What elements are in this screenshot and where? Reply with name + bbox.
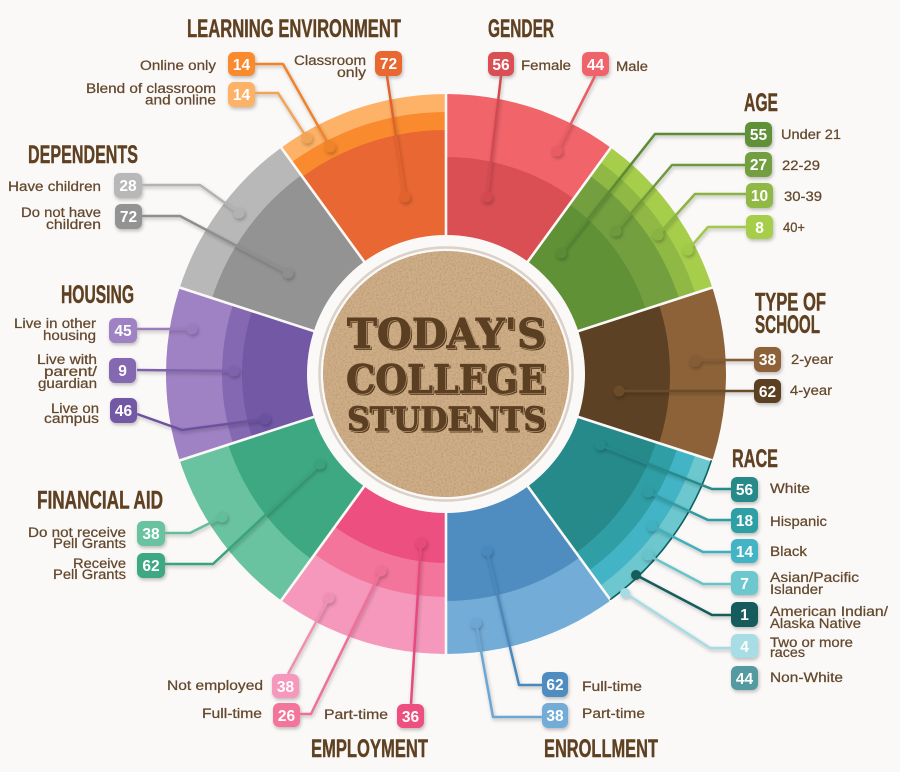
callout: female: Female — [521, 58, 571, 73]
heading — [755, 288, 826, 339]
callout: other housing — [14, 316, 198, 343]
callout: have children: 28 — [119, 178, 137, 195]
callout: have children — [8, 173, 244, 218]
heading: SCHOOL — [755, 311, 820, 339]
callout: receive: Pell Grants — [53, 567, 126, 582]
callout: non-white — [731, 666, 843, 690]
wedge: dependents — [180, 148, 363, 330]
callout: classroom only: Classroom — [294, 53, 366, 68]
wedge: employment — [282, 487, 445, 654]
callout: under 21 — [556, 122, 841, 258]
callout: on campus — [44, 398, 270, 430]
callout: no children: children — [46, 217, 101, 232]
callout: asian/pacific islander: Asian/Pacific — [770, 570, 859, 585]
callout: american indian — [631, 570, 888, 631]
panel: age — [556, 89, 841, 258]
callout: do not receive: Pell Grants — [53, 536, 126, 551]
callout: black: Black — [770, 544, 807, 559]
wedge: gender — [447, 94, 610, 261]
callout: receive — [53, 458, 326, 582]
callout: do not receive: Do not receive — [28, 525, 126, 540]
wedge: enrollment — [447, 487, 610, 654]
callout: full-time: 26 — [278, 708, 295, 725]
wedge: financial aid — [180, 418, 364, 600]
callout: part-time: Part-time — [324, 707, 388, 722]
callout: non-white: 44 — [736, 671, 753, 688]
callout: not employed: 38 — [277, 679, 294, 696]
callout: full-time — [482, 546, 642, 697]
title: STUDENTS — [347, 400, 546, 438]
callout: part-time — [470, 618, 645, 728]
callout: parent/guardian — [37, 352, 240, 391]
callout: non-white: Non-White — [770, 670, 843, 685]
wedge: race — [528, 418, 712, 600]
callout: 2-year: 2-year — [791, 352, 834, 367]
wedge: learning environment — [282, 94, 445, 261]
callout: not employed: Not employed — [167, 678, 263, 693]
callout: male: 44 — [587, 57, 604, 74]
callout: 4-year — [614, 379, 833, 403]
callout: full-time: Full-time — [202, 706, 262, 721]
callout: receive: Receive — [73, 556, 126, 571]
callout: full-time — [202, 566, 386, 727]
callout: parent/guardian: 9 — [118, 363, 127, 380]
heading: ENROLLMENT — [544, 735, 658, 763]
callout: black: 14 — [736, 544, 753, 561]
callout: blend: Blend of classroom — [86, 81, 216, 96]
panel: race — [594, 440, 888, 690]
callout: parent/guardian: parent/ — [44, 364, 97, 379]
callout: two or more races: 4 — [740, 639, 749, 656]
callout: 40+ — [682, 215, 805, 256]
wedge: housing — [166, 288, 314, 460]
callout: 4-year: 4-year — [790, 383, 833, 398]
heading: HOUSING — [61, 281, 134, 309]
callout: two or more races — [620, 588, 853, 660]
callout: asian/pacific islander — [642, 550, 859, 597]
callout: 22-29: 27 — [750, 157, 767, 174]
callout: online only: 14 — [233, 57, 250, 74]
callout: 2-year — [689, 347, 834, 372]
callout: other housing: 45 — [114, 323, 132, 340]
title: TODAY'S — [347, 310, 546, 358]
callout: have children: Have children — [8, 179, 101, 194]
callout: two or more races: Two or more — [770, 635, 853, 650]
callout: under 21: 55 — [750, 127, 767, 144]
callout: black — [646, 520, 807, 563]
callout: white — [594, 440, 810, 502]
title: COLLEGE — [348, 358, 548, 404]
title: TODAY'S — [348, 312, 548, 360]
wheel chart — [166, 92, 726, 656]
callout: white: White — [770, 481, 810, 496]
wedge: type of school — [578, 288, 726, 460]
callout: part-time: Part-time — [582, 706, 645, 721]
callout: on campus: campus — [44, 411, 99, 426]
callout: online only — [140, 52, 336, 152]
callout: 2-year: 38 — [759, 352, 776, 369]
callout: 22-29: 22-29 — [782, 158, 820, 173]
callout: on campus: Live on — [51, 401, 99, 416]
callout: classroom only: 72 — [380, 56, 397, 73]
panel: employment — [167, 538, 428, 763]
center badge — [307, 235, 585, 513]
callout: do not receive — [28, 512, 228, 551]
callout: asian/pacific islander: Islander — [770, 582, 824, 597]
callout: 4-year: 62 — [759, 384, 776, 401]
callout: part-time — [324, 538, 426, 728]
callout: 30-39 — [652, 183, 822, 240]
heading: EMPLOYMENT — [311, 735, 428, 763]
callout: no children: Do not have — [21, 205, 101, 220]
callout: hispanic: 18 — [736, 513, 753, 530]
heading: AGE — [744, 89, 778, 117]
callout: full-time: Full-time — [582, 679, 642, 694]
panel: financial aid — [28, 458, 326, 582]
heading: DEPENDENTS — [28, 141, 138, 169]
callout: blend: and online — [145, 92, 216, 108]
title: COLLEGE — [346, 357, 546, 403]
callout: white: 56 — [736, 482, 753, 499]
callout: not employed — [167, 592, 334, 698]
wedge: age — [528, 148, 712, 330]
callout: no children — [21, 204, 294, 278]
callout: hispanic — [642, 486, 827, 533]
panel: learning environment — [86, 15, 410, 202]
callout: part-time: 38 — [546, 708, 564, 725]
callout: 40+: 40+ — [783, 220, 805, 235]
callout: parent/guardian: Live with — [37, 352, 97, 367]
panel: type of school — [614, 288, 834, 403]
title: TODAY'S — [347, 310, 546, 358]
panel: enrollment — [470, 546, 658, 763]
callout: female — [482, 52, 571, 202]
heading: FINANCIAL AID — [37, 486, 163, 514]
title: STUDENTS — [347, 400, 546, 438]
callout: asian/pacific islander: 7 — [740, 576, 749, 593]
callout: other housing: Live in other — [14, 316, 97, 331]
heading: GENDER — [488, 15, 554, 43]
callout: no children: 72 — [120, 209, 137, 226]
callout: part-time: 36 — [402, 709, 419, 726]
callout: hispanic: Hispanic — [770, 514, 827, 529]
callout: classroom only: only — [337, 65, 366, 80]
heading: TYPE OF — [755, 288, 826, 316]
title — [346, 310, 548, 440]
callout: blend — [86, 81, 312, 144]
callout: 22-29 — [610, 152, 820, 236]
title: STUDENTS — [348, 401, 548, 440]
callout: do not receive: 38 — [142, 526, 160, 543]
callout: american indian: American Indian/ — [770, 604, 888, 619]
callout: female: 56 — [492, 57, 510, 74]
callout: american indian: Alaska Native — [770, 616, 861, 631]
callout: full-time: 62 — [546, 677, 564, 694]
panel: gender — [482, 15, 648, 202]
callout: classroom only — [294, 51, 410, 202]
heading: RACE — [732, 445, 778, 473]
callout: 30-39: 30-39 — [784, 189, 822, 204]
callout: two or more races: races — [770, 645, 805, 660]
callout: receive: 62 — [142, 558, 160, 575]
callout: on campus: 46 — [115, 403, 132, 420]
callout: 30-39: 10 — [751, 188, 768, 205]
title: COLLEGE — [346, 357, 546, 403]
callout: other housing: housing — [43, 328, 96, 343]
callout: parent/guardian: guardian — [38, 376, 97, 391]
callout: male: Male — [616, 59, 648, 74]
panel: housing — [14, 281, 270, 430]
panel: dependents — [8, 141, 294, 278]
heading: LEARNING ENVIRONMENT — [187, 15, 401, 43]
callout: 40+: 8 — [755, 220, 764, 237]
callout: under 21: Under 21 — [781, 127, 841, 142]
callout: blend: 14 — [233, 87, 250, 104]
callout: male — [552, 52, 648, 156]
callout: american indian: 1 — [740, 607, 749, 624]
callout: online only: Online only — [140, 58, 216, 73]
